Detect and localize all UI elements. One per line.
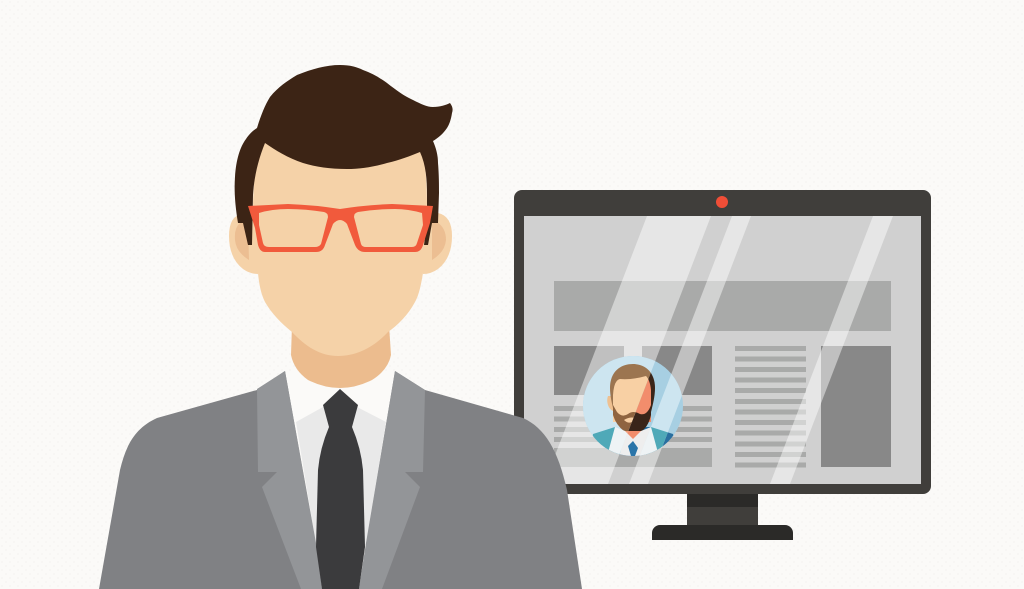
monitor frame bbox=[514, 190, 931, 494]
glass reflections bbox=[544, 216, 893, 484]
avatar bbox=[583, 356, 683, 460]
left ear bbox=[229, 214, 258, 274]
middle text lines bbox=[735, 346, 806, 468]
web page layout bbox=[554, 281, 891, 468]
screen bbox=[524, 216, 921, 484]
hair bbox=[235, 65, 453, 245]
right ear bbox=[423, 213, 452, 274]
tie bbox=[316, 389, 365, 589]
right lapel bbox=[359, 371, 425, 589]
face bbox=[253, 135, 427, 356]
avatar shaded layer bbox=[583, 356, 683, 460]
suit jacket bbox=[99, 371, 582, 589]
left text lines bbox=[554, 406, 712, 467]
image blocks bbox=[554, 346, 712, 395]
monitor stand bbox=[652, 492, 793, 540]
webcam bbox=[716, 196, 728, 208]
shirt shading bbox=[296, 407, 386, 545]
monitor bbox=[514, 190, 931, 540]
avatar lit layer bbox=[583, 356, 683, 460]
glasses bbox=[248, 204, 433, 252]
header banner bbox=[554, 281, 891, 331]
shirt bbox=[285, 371, 395, 589]
person bbox=[99, 65, 582, 589]
left lapel bbox=[257, 371, 322, 589]
right image block bbox=[821, 346, 891, 467]
neck bbox=[291, 325, 391, 388]
